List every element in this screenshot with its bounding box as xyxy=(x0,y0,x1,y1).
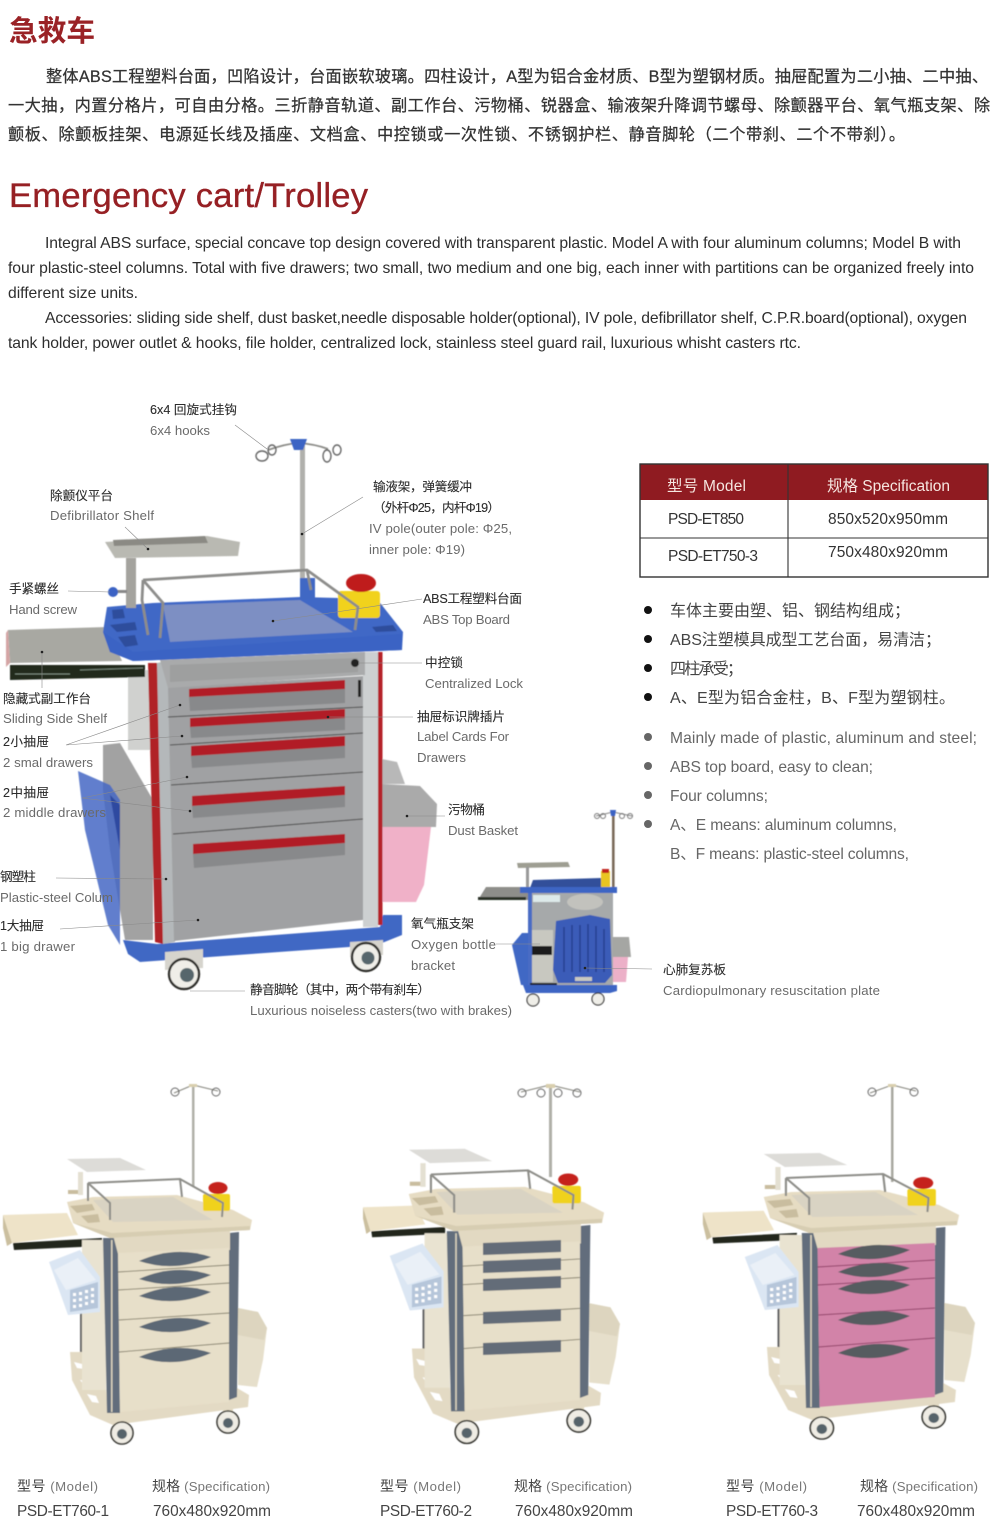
lid panel and lock xyxy=(160,652,365,697)
label: big drawer xyxy=(0,919,76,954)
IV pole with hooks xyxy=(256,439,341,599)
feature list: Chinese: 车体主要由塑、铝、钢结构组成； xyxy=(670,602,910,620)
text block: Chinese description: 颤板、除颤板挂架、电源延长线及插座、文档盒、中控锁或一次性锁、不锈钢护栏、静音脚轮（二个带刹、二个不带刹）。 xyxy=(8,126,905,144)
label: casters: Luxurious noiseless casters(two with brakes) xyxy=(250,1003,512,1018)
label: sliding side shelf: 隐藏式副工作台 xyxy=(3,692,91,706)
label: defibrillator shelf: Defibrillator Shelf xyxy=(50,508,154,523)
feature list: Chinese: A、E型为铝合金柱，B、F型为塑钢柱。 xyxy=(670,689,955,707)
top board xyxy=(103,597,403,661)
caption: PSD-ET760-1: 760x480x920mm xyxy=(153,1503,271,1520)
cart base xyxy=(123,915,402,962)
text block: English description: Accessories: sliding side shelf, dust basket,needle disposable holder(optional), IV pole, defibrillator shelf, C.P.R.board(optional), oxygen xyxy=(45,310,967,327)
columns xyxy=(148,652,382,944)
label: dust basket: Dust Basket xyxy=(448,823,518,838)
label: sliding side shelf xyxy=(3,692,107,726)
label: CPR plate: Cardiopulmonary resuscitation plate xyxy=(663,983,880,998)
caption: PSD-ET760-2: PSD-ET760-2 xyxy=(380,1503,472,1520)
label: hand screw: Hand screw xyxy=(9,602,77,617)
label: defibrillator shelf: 除颤仪平台 xyxy=(50,489,113,503)
feature list: English: ABS top board, easy to clean; xyxy=(670,759,873,776)
label: CPR plate xyxy=(663,962,880,998)
label: sliding side shelf: Sliding Side Shelf xyxy=(3,711,107,726)
yellow sharps box with red button xyxy=(338,574,380,618)
caption: PSD-ET760-3: PSD-ET760-3 xyxy=(726,1503,818,1520)
label: label cards: 抽屉标识牌插片 xyxy=(417,709,505,724)
caption: PSD-ET760-2: 760x480x920mm xyxy=(515,1503,633,1520)
table text: 850x520x950mm xyxy=(828,511,948,528)
label: label cards: Label Cards For xyxy=(417,729,510,744)
caption: PSD-ET760-3 xyxy=(726,1478,978,1520)
label: IV pole: IV pole(outer pole: Φ25, xyxy=(369,521,512,536)
label: IV pole: （外杆Φ25，内杆Φ19） xyxy=(373,501,500,515)
label: hooks xyxy=(150,403,237,438)
label: defibrillator shelf xyxy=(50,489,154,523)
callout leader lines xyxy=(41,425,652,991)
main cart illustration: blue and red trolley xyxy=(6,439,437,989)
label: oxygen bracket: bracket xyxy=(411,958,455,973)
label: centralized lock: 中控锁 xyxy=(425,655,463,670)
label: plastic-steel column: 钢塑柱 xyxy=(0,870,36,884)
feature list: English: Four columns; xyxy=(670,788,768,805)
caption: PSD-ET760-2: 规格 (Specification) xyxy=(514,1478,632,1494)
label: casters xyxy=(250,982,512,1018)
caption: PSD-ET760-3: 760x480x920mm xyxy=(857,1503,975,1520)
label: small drawers: 2 smal drawers xyxy=(3,755,93,770)
board xyxy=(530,878,606,888)
label: casters: 静音脚轮（其中，两个带有刹车） xyxy=(250,982,430,997)
feature list: English: Mainly made of plastic, aluminum and steel; xyxy=(670,730,977,747)
label: IV pole: 输液架，弹簧缓冲 xyxy=(373,479,472,494)
title: English: Emergency cart/Trolley xyxy=(9,177,369,215)
side bins xyxy=(512,933,530,985)
feature list: Chinese: 四柱承受； xyxy=(670,660,743,678)
back-view cart illustration xyxy=(478,810,632,1006)
text block: English description xyxy=(8,235,974,352)
label: centralized lock: Centralized Lock xyxy=(425,676,523,691)
body xyxy=(528,892,613,986)
table text: 规格 Specification xyxy=(827,477,950,495)
defibrillator shelf and post xyxy=(105,536,240,608)
label: CPR plate: 心肺复苏板 xyxy=(663,962,726,977)
label: label cards: Drawers xyxy=(417,750,466,765)
table text xyxy=(667,477,950,565)
caption: PSD-ET760-2 xyxy=(380,1478,633,1520)
body rear xyxy=(128,670,158,750)
table header xyxy=(640,464,988,500)
feature list: English: A、E means: aluminum columns, xyxy=(670,817,897,834)
caption: PSD-ET760-1: 型号 (Model) xyxy=(17,1478,98,1494)
caption: PSD-ET760-1 xyxy=(17,1478,271,1520)
label: oxygen bracket: Oxygen bottle xyxy=(411,937,496,952)
IV pole xyxy=(594,810,632,985)
drawer front with five drawers xyxy=(168,676,363,941)
caption: PSD-ET760-1: PSD-ET760-1 xyxy=(17,1503,109,1520)
straps xyxy=(530,946,557,990)
text block: Chinese description: 整体ABS工程塑料台面，凹陷设计，台面嵌软玻璃。四柱设计，A型为铝合金材质、B型为塑钢材质。抽屉配置为二小抽、二中抽、 xyxy=(46,68,988,86)
table text: 750x480x920mm xyxy=(828,544,948,561)
label: hooks: 6x4 hooks xyxy=(150,423,210,438)
caption: PSD-ET760-3: 型号 (Model) xyxy=(726,1478,807,1494)
text block: English description: tank holder, power outlet & hooks, file holder, centralized lock, stainless steel guard rail, luxurious whisht casters rtc. xyxy=(8,335,801,352)
label: ABS top board: ABS Top Board xyxy=(423,612,510,627)
label: hooks: 6x4 回旋式挂钩 xyxy=(150,403,237,417)
label: hand screw xyxy=(9,582,77,617)
label: big drawer: 1大抽屉 xyxy=(0,919,44,933)
label: IV pole xyxy=(369,479,512,557)
callout labels xyxy=(0,403,880,1018)
feature list: Chinese: ABS注塑模具成型工艺台面，易清洁； xyxy=(670,631,941,649)
label: oxygen bracket: 氧气瓶支架 xyxy=(411,916,474,931)
label: middle drawers xyxy=(3,786,106,820)
text block: English description: Integral ABS surface, special concave top design covered with transparent plastic. Model A with four aluminum columns; Model B with xyxy=(45,235,961,252)
table text: PSD-ET750-3 xyxy=(668,548,758,565)
product photo: PSD-ET760-3 pink cart xyxy=(703,1084,975,1439)
shelves xyxy=(517,862,570,868)
specification table xyxy=(640,464,988,577)
table text: 型号 Model xyxy=(667,477,746,495)
label: dust basket: 污物桶 xyxy=(448,803,485,817)
product photo: PSD-ET760-2 beige cart xyxy=(363,1084,620,1443)
label: plastic-steel column xyxy=(0,870,113,905)
caption: PSD-ET760-3: 规格 (Specification) xyxy=(860,1478,978,1494)
caption: PSD-ET760-2: 型号 (Model) xyxy=(380,1478,461,1494)
label: small drawers xyxy=(3,735,93,770)
side bin and blue rear tray xyxy=(78,743,153,945)
label: centralized lock xyxy=(425,655,523,691)
text block: Chinese description xyxy=(8,68,990,144)
product photo: PSD-ET760-1 beige cart xyxy=(3,1084,267,1444)
label: plastic-steel column: Plastic-steel Colum xyxy=(0,890,113,905)
text block: English description: four plastic-steel columns. Total with five drawers; two small, two medium and one big, each inner with partitions can be organized freely into xyxy=(8,260,974,277)
label: IV pole: inner pole: Φ19) xyxy=(369,542,465,557)
title: Chinese: 急救车 xyxy=(9,16,95,48)
label: big drawer: 1 big drawer xyxy=(0,939,76,954)
label: small drawers: 2小抽屉 xyxy=(3,735,49,749)
label: ABS top board xyxy=(423,592,522,627)
table text: PSD-ET850 xyxy=(668,511,744,528)
feature list: English xyxy=(644,730,977,863)
label: middle drawers: 2中抽屉 xyxy=(3,786,49,800)
base and casters xyxy=(523,985,617,993)
label: hand screw: 手紧螺丝 xyxy=(9,582,59,596)
label: oxygen bracket xyxy=(411,916,496,973)
label: dust basket xyxy=(448,803,518,838)
CPR board xyxy=(553,915,612,983)
stainless guard rail xyxy=(142,570,358,638)
feature list: Chinese xyxy=(644,602,955,707)
label: middle drawers: 2 middle drawers xyxy=(3,805,106,820)
caption: PSD-ET760-1: 规格 (Specification) xyxy=(152,1478,270,1494)
text block: Chinese description: 一大抽，内置分格片，可自由分格。三折静音轨道、副工作台、污物桶、锐器盒、输液架升降调节螺母、除颤器平台、氧气瓶支架、除 xyxy=(8,97,990,115)
sliding side shelf xyxy=(6,627,145,680)
text block: English description: different size units. xyxy=(8,285,138,302)
hand screw xyxy=(108,587,127,597)
feature list: English: B、F means: plastic-steel columns, xyxy=(670,846,909,863)
label: ABS top board: ABS工程塑料台面 xyxy=(423,592,522,606)
label: label cards xyxy=(417,709,510,765)
dust basket xyxy=(382,759,437,902)
caster wheels xyxy=(165,940,383,989)
